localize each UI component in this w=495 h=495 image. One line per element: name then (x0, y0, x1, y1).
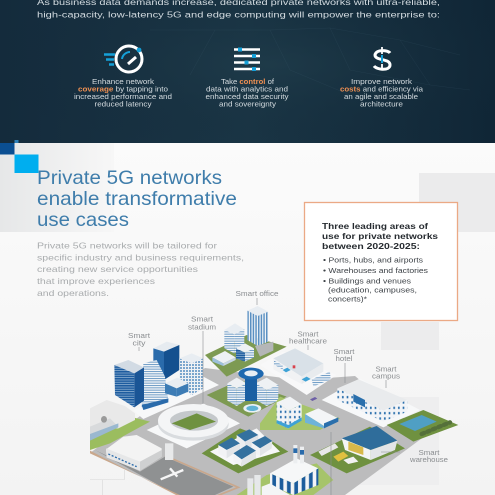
caption: costs: architecture (360, 100, 403, 108)
callout: three leading areas (304, 202, 458, 320)
caption: costs (340, 77, 423, 108)
icon: dollar (374, 47, 390, 70)
title: Private 5G networks (37, 167, 222, 189)
caption: costs: an agile and scalable (344, 92, 418, 101)
tennis park (387, 410, 458, 442)
labels: city callouts: stadium (188, 322, 216, 332)
body text: specific industry and business requirements, (37, 252, 244, 262)
left building (90, 400, 150, 450)
labels: city callouts: Smart (191, 314, 213, 324)
labels: city callouts: warehouse (409, 455, 448, 464)
caption: coverage: Enhance network (92, 77, 154, 86)
caption: coverage: reduced latency (94, 100, 152, 108)
callout: three leading areas: (education, campuses, (328, 286, 417, 294)
intro text: high-capacity, low-latency 5G and edge computing will empower the enterprise to: (37, 10, 440, 20)
labels: city callouts: hotel (336, 354, 353, 363)
callout: three leading areas: • Ports, hubs, and airports (323, 256, 423, 264)
labels: city callouts: city (132, 338, 146, 348)
housing park (202, 428, 288, 473)
labels: city callouts: healthcare (289, 336, 327, 346)
icon: speedometer (104, 46, 142, 72)
caption: control (206, 77, 289, 108)
smart warehouse (310, 426, 405, 473)
labels: city callouts: Smart (128, 331, 150, 340)
airport (90, 435, 238, 495)
callout: three leading areas: between 2020-2025: (322, 241, 420, 251)
title: enable transformative (37, 188, 237, 210)
labels: city callouts: Smart (298, 330, 319, 338)
caption: control: enhanced data security (206, 92, 289, 101)
caption: coverage: increased performance and (74, 92, 172, 101)
labels: city callouts: Smart (334, 347, 355, 356)
purple car (310, 397, 317, 401)
smart city buildings (114, 342, 219, 419)
label leader lines (139, 298, 400, 495)
smart healthcare (260, 348, 337, 395)
smart hotel (207, 368, 287, 417)
callout: three leading areas: concerts)* (328, 294, 367, 304)
caption: coverage (74, 77, 172, 108)
title (37, 167, 237, 231)
smart campus (322, 378, 420, 427)
caption: control: data with analytics and (206, 84, 288, 94)
icon: sliders (234, 48, 260, 71)
smart stadium (147, 403, 240, 448)
callout: three leading areas: • Buildings and venues (323, 276, 411, 286)
caption: coverage: coverage by tapping into (78, 84, 168, 94)
caption: costs: costs and efficiency via (340, 84, 423, 94)
caption: control: and sovereignty (219, 100, 276, 108)
smart factory (237, 445, 333, 495)
panel: dark header band (0, 0, 495, 143)
illustration: isometric smart city (90, 306, 458, 495)
callout: three leading areas: use for private networks (322, 231, 438, 241)
decorative corner squares (0, 140, 38, 173)
caption: costs: Improve network (351, 77, 412, 86)
caption: control: Take control of (221, 77, 274, 86)
body text: Private 5G networks will be tailored for (37, 240, 217, 250)
panel: light background (0, 143, 495, 495)
title: use cases (37, 209, 129, 231)
body text: creating new service opportunities (37, 264, 198, 274)
body text (37, 240, 244, 298)
intro text (37, 0, 440, 20)
body text: and operations. (37, 288, 109, 298)
body text: that improve experiences (37, 276, 155, 286)
labels: city callouts (128, 289, 448, 464)
labels: city callouts: Smart office (236, 289, 278, 298)
callout: three leading areas: • Warehouses and factories (323, 266, 428, 275)
callout: three leading areas: Three leading areas of (322, 221, 428, 231)
smart office park (205, 306, 287, 377)
labels: city callouts: Smart (418, 448, 440, 457)
garden and small buildings (260, 397, 340, 430)
ground roads (90, 368, 425, 495)
labels: city callouts: Smart (376, 364, 397, 374)
labels: city callouts: campus (372, 372, 400, 380)
